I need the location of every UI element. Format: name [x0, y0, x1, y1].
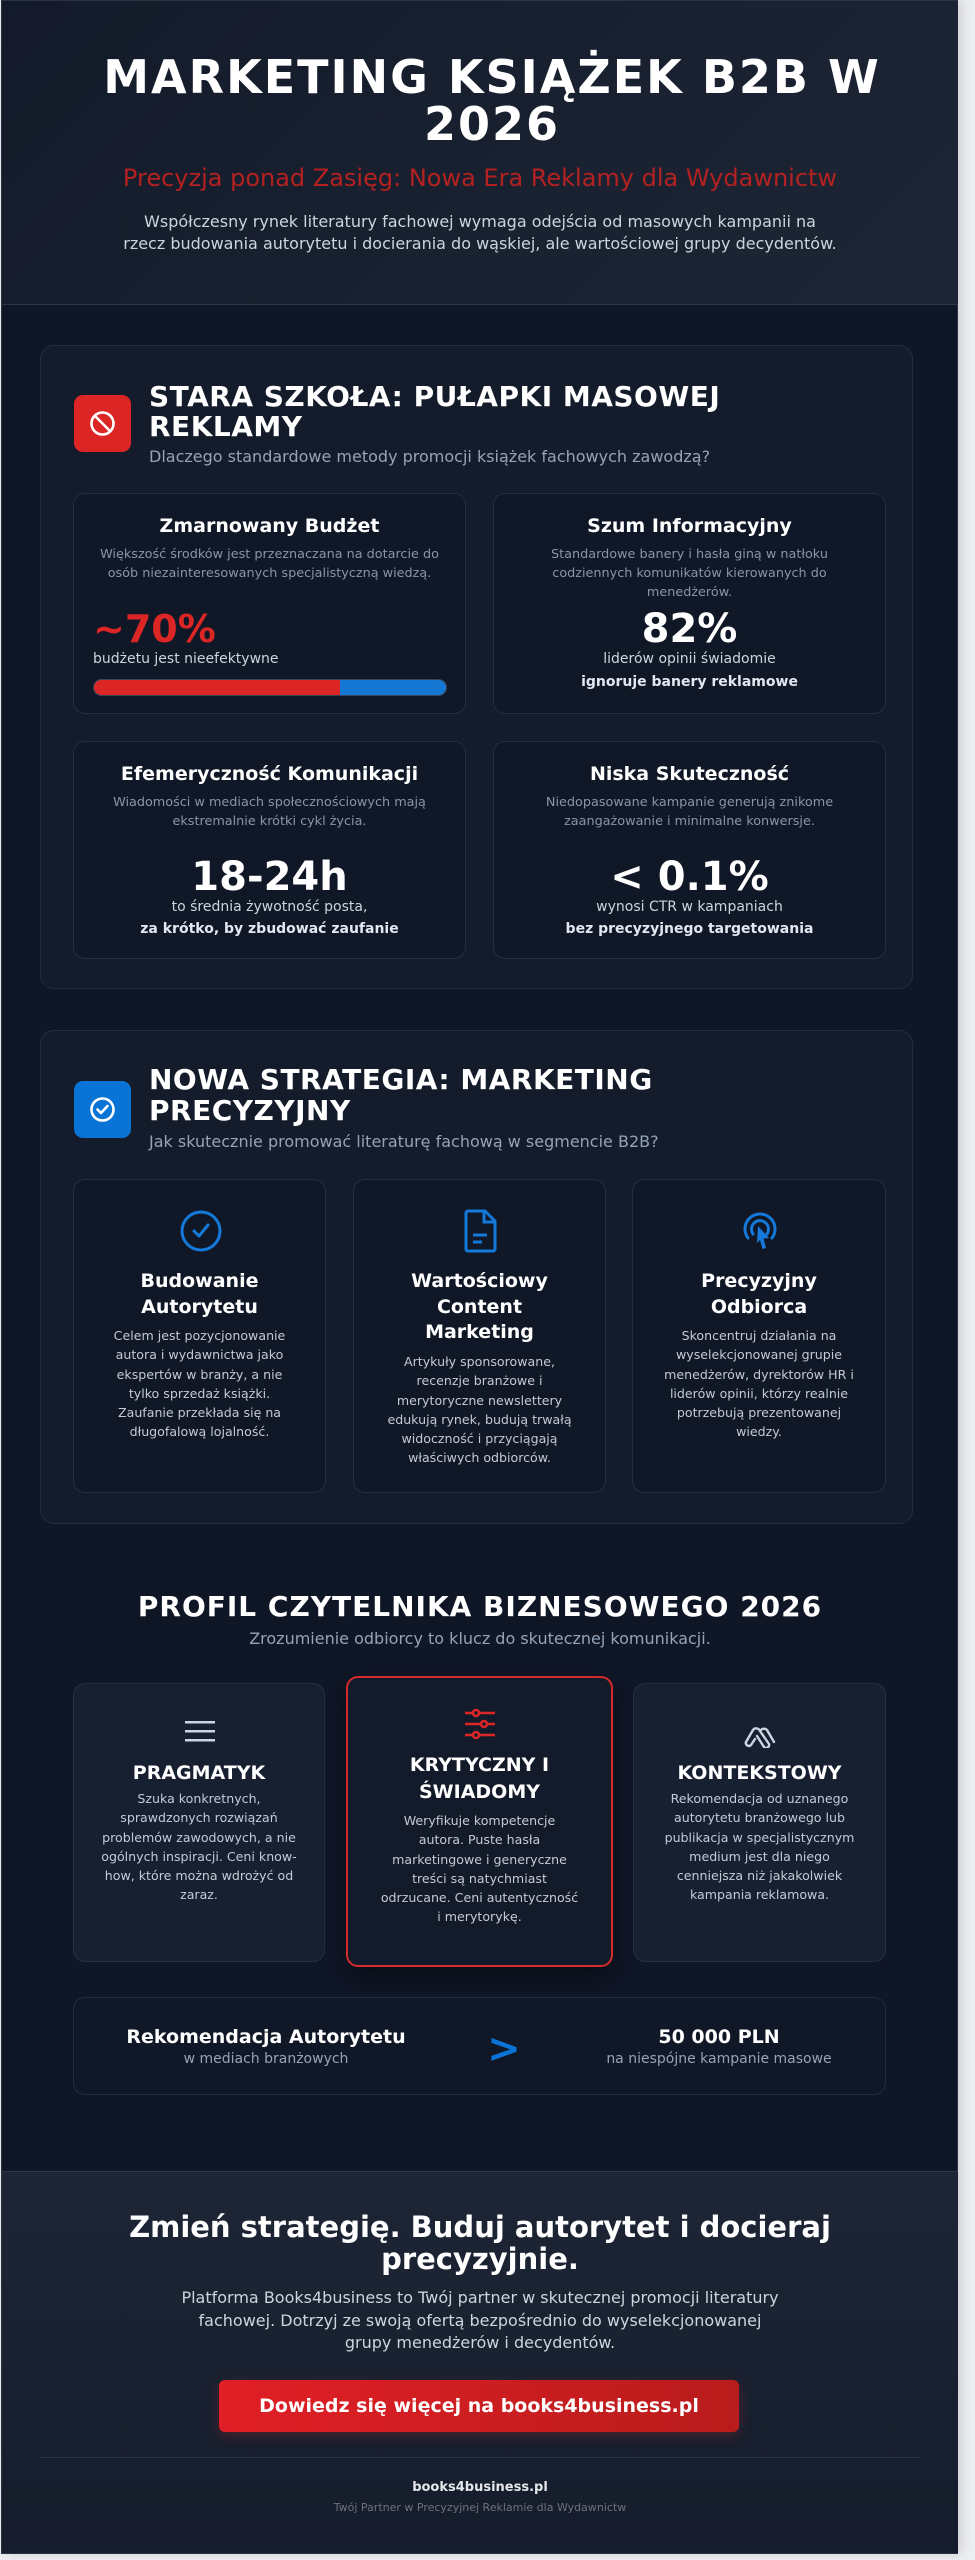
- bar chart: 70%: [93, 679, 447, 696]
- left: recommendation: Rekomendacja Autorytetu: [126, 2026, 406, 2048]
- CTA text: Platforma Books4business to Twój partner w skutecznej promocji literatury: [181, 2288, 779, 2307]
- card: authority: długofalową lojalność.: [130, 1424, 269, 1439]
- icon: check circle: [180, 1210, 222, 1252]
- card: pragmatist: sprawdzonych rozwiązań: [120, 1810, 278, 1825]
- right: 50 000 PLN: na niespójne kampanie masowe: [606, 2051, 832, 2067]
- card: content marketing: Wartościowy: [411, 1270, 548, 1292]
- card: low effectiveness: zaangażowanie i minimalne konwersje.: [564, 814, 815, 829]
- card: precise audience: wyselekcjonowanej grupie: [676, 1347, 842, 1362]
- card: content marketing: [353, 1179, 606, 1493]
- card: content marketing: Marketing: [425, 1321, 534, 1343]
- card: content marketing: recenzje branżowe i: [417, 1373, 542, 1388]
- card: pragmatist: zaraz.: [180, 1887, 218, 1902]
- card: authority: Budowanie: [141, 1270, 258, 1292]
- card: precise audience: liderów opinii, którzy realnie: [670, 1386, 848, 1401]
- card: information noise: [493, 493, 886, 714]
- card: authority: Zaufanie przekłada się na: [118, 1405, 281, 1420]
- card: contextual: cenniejsza niż jakakolwiek: [677, 1868, 842, 1883]
- CTA text: [181, 2288, 779, 2352]
- card: low effectiveness: bez precyzyjnego targetowania: [566, 921, 813, 937]
- card: ephemerality: Efemeryczność Komunikacji: [121, 763, 418, 785]
- arrow: greater than: >: [487, 2026, 521, 2072]
- card: contextual: KONTEKSTOWY: [677, 1762, 842, 1784]
- footer tagline: Twój Partner w Precyzyjnej Reklamie dla Wydawnictw: [334, 2501, 626, 2514]
- CTA heading: precyzyjnie.: [381, 2242, 579, 2276]
- card: precise audience: Odbiorca: [711, 1296, 807, 1318]
- card: information noise: liderów opinii świadomie: [603, 651, 776, 667]
- CTA button: [219, 2380, 739, 2432]
- footer brand: books4business.pl: [412, 2480, 548, 2495]
- section subtitle: Jak skutecznie promować literaturę fachową w segmencie B2B?: [149, 1132, 659, 1151]
- card: wasted budget: osób niezainteresowanych specjalistyczną wiedzą.: [108, 566, 431, 581]
- panel: old school: [40, 345, 913, 989]
- card: information noise: Szum Informacyjny: [587, 515, 792, 537]
- card: pragmatist: Szuka konkretnych,: [137, 1791, 261, 1806]
- card: critical (highlighted): odrzucane. Ceni autentyczność: [381, 1890, 578, 1905]
- card: ephemerality: ekstremalnie krótki cykl życia.: [172, 814, 366, 829]
- card: ephemerality: za krótko, by zbudować zaufanie: [140, 921, 399, 937]
- icon: document: [464, 1210, 496, 1252]
- intro text: Współczesny rynek literatury fachowej wymaga odejścia od masowych kampanii na: [144, 212, 816, 231]
- stat: ~70%: ~70%: [93, 607, 216, 651]
- icon: click target: [744, 1212, 776, 1249]
- card: content marketing: edukują rynek, budują trwałą: [387, 1412, 572, 1427]
- footer CTA section: [2, 2171, 958, 2553]
- card: pragmatist: PRAGMATYK: [133, 1762, 265, 1784]
- card: critical (highlighted): Weryfikuje kompetencje: [404, 1813, 555, 1828]
- card: authority: tylko sprzedaż książki.: [129, 1386, 270, 1401]
- right: 50 000 PLN: 50 000 PLN: [658, 2026, 780, 2048]
- card: low effectiveness: Niska Skuteczność: [590, 763, 789, 785]
- card: contextual: publikacja w specjalistycznym: [665, 1830, 854, 1845]
- card: content marketing: Artykuły sponsorowane,: [404, 1354, 555, 1369]
- card: precise audience: Precyzyjny: [701, 1270, 817, 1292]
- card: wasted budget: budżetu jest nieefektywne: [93, 651, 279, 667]
- heading: PRECYZYJNY: [149, 1094, 351, 1127]
- icon: handshake: [744, 1727, 776, 1748]
- card: low effectiveness: wynosi CTR w kampaniach: [596, 899, 783, 915]
- CTA text: grupy menedżerów i decydentów.: [345, 2333, 615, 2352]
- card: pragmatist: how, które można wdrożyć od: [105, 1868, 293, 1883]
- CTA heading: Zmień strategię. Buduj autorytet i docieraj: [129, 2210, 831, 2244]
- card: precise audience: wiedzy.: [736, 1424, 782, 1439]
- card: content marketing: widoczność i przyciągają: [401, 1431, 558, 1446]
- CTA button: Dowiedz się więcej na books4business.pl: [259, 2395, 699, 2417]
- heading: [149, 380, 720, 443]
- card: contextual: autorytetu branżowego lub: [674, 1810, 845, 1825]
- card: precise audience: potrzebują prezentowanej: [677, 1405, 841, 1420]
- icon: sliders: [465, 1709, 495, 1739]
- card: precise audience: menedżerów, dyrektorów HR i: [664, 1367, 854, 1382]
- title: [103, 50, 881, 151]
- card: authority: autora i wydawnictwa jako: [116, 1347, 283, 1362]
- card: authority: [73, 1179, 326, 1493]
- left: recommendation: w mediach branżowych: [184, 2051, 348, 2067]
- card: content marketing: Content: [437, 1296, 522, 1318]
- card: contextual: kampania reklamowa.: [690, 1887, 829, 1902]
- subtitle: Precyzja ponad Zasięg: Nowa Era Reklamy dla Wydawnictw: [123, 164, 837, 192]
- subtitle: reader profile: Zrozumienie odbiorcy to klucz do skutecznej komunikacji.: [249, 1629, 711, 1648]
- card: authority: Autorytetu: [141, 1296, 258, 1318]
- card: precise audience: Skoncentruj działania na: [682, 1328, 836, 1343]
- card: critical (highlighted): treści są natychmiast: [412, 1871, 547, 1886]
- card: low effectiveness: Niedopasowane kampanie generują znikome: [546, 795, 833, 810]
- card: critical (highlighted): KRYTYCZNY I: [410, 1754, 549, 1776]
- card: information noise: menedżerów.: [647, 585, 732, 600]
- card: critical (highlighted): autora. Puste hasła: [419, 1832, 540, 1847]
- header band: [2, 1, 958, 305]
- card: information noise: ignoruje banery reklamowe: [581, 674, 798, 690]
- card: contextual: medium jest dla niego: [689, 1849, 830, 1864]
- card: content marketing: merytoryczne newslettery: [397, 1393, 562, 1408]
- card: contextual: Rekomendacja od uznanego: [671, 1791, 848, 1806]
- card: pragmatist: [73, 1683, 325, 1962]
- card: information noise: codziennych komunikatów kierowanych do: [552, 566, 827, 581]
- stat: 18-24h: 18-24h: [191, 854, 348, 900]
- heading: NOWA STRATEGIA: MARKETING: [149, 1063, 653, 1096]
- card: critical (highlighted): [346, 1676, 613, 1967]
- card: ephemerality: to średnia żywotność posta,: [172, 899, 367, 915]
- card: wasted budget: Większość środków jest przeznaczana na dotarcie do: [100, 547, 439, 562]
- panel: new strategy: [40, 1030, 913, 1524]
- card: pragmatist: problemów zawodowych, a nie: [102, 1830, 296, 1845]
- card: critical (highlighted): ŚWIADOMY: [419, 1781, 540, 1803]
- icon: lines: [185, 1721, 215, 1742]
- card: low effectiveness: [493, 741, 886, 959]
- title: 2026: [424, 97, 560, 151]
- card: information noise: Standardowe banery i hasła giną w natłoku: [551, 547, 828, 562]
- left: recommendation: [126, 2026, 406, 2067]
- icon: check: [74, 1081, 131, 1138]
- stat: 82%: 82%: [642, 606, 737, 652]
- card: authority: ekspertów w branży, a nie: [117, 1367, 282, 1382]
- card: content marketing: właściwych odbiorców.: [408, 1450, 551, 1465]
- card: ephemerality: [73, 741, 466, 959]
- heading: STARA SZKOŁA: PUŁAPKI MASOWEJ: [149, 380, 720, 413]
- card: wasted budget: Zmarnowany Budżet: [160, 515, 379, 537]
- heading: [149, 1063, 653, 1127]
- card: pragmatist: ogólnych inspiracji. Ceni know-: [101, 1849, 297, 1864]
- CTA heading: [129, 2210, 831, 2276]
- heading: REKLAMY: [149, 410, 303, 443]
- card: authority: Celem jest pozycjonowanie: [114, 1328, 285, 1343]
- icon: ban: [74, 395, 131, 452]
- comparison box: [73, 1997, 886, 2095]
- intro text: [123, 212, 837, 253]
- card: ephemerality: Wiadomości w mediach społecznościowych mają: [113, 795, 426, 810]
- intro text: rzecz budowania autorytetu i docierania do wąskiej, ale wartościowej grupy decydentów.: [123, 234, 837, 253]
- heading: reader profile: PROFIL CZYTELNIKA BIZNESOWEGO 2026: [138, 1590, 822, 1623]
- stat: <0.1%: < 0.1%: [610, 854, 769, 900]
- card: critical (highlighted): marketingowe i generyczne: [392, 1852, 567, 1867]
- section subtitle: Dlaczego standardowe metody promocji książek fachowych zawodzą?: [149, 447, 710, 466]
- card: contextual: [633, 1683, 886, 1962]
- right: 50 000 PLN: [606, 2026, 832, 2067]
- title: MARKETING KSIĄŻEK B2B W: [103, 50, 881, 104]
- card: precise audience: [632, 1179, 886, 1493]
- card: wasted budget: [73, 493, 466, 714]
- CTA text: fachowej. Dotrzyj ze swoją ofertą bezpośrednio do wyselekcjonowanej: [199, 2310, 761, 2330]
- card: critical (highlighted): i merytorykę.: [437, 1909, 522, 1924]
